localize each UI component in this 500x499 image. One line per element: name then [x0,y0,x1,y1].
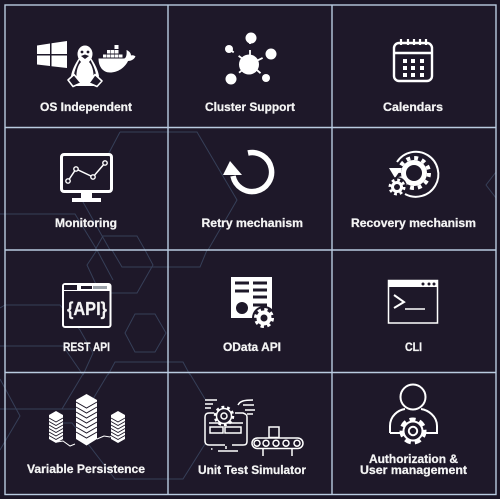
cell: Variable Persistence [27,394,145,476]
cell: Recovery mechanism [351,152,476,230]
label: Monitoring [55,216,117,230]
cell: Calendars [383,39,443,114]
icon: terminal window [388,280,438,323]
label: Cluster Support [205,100,295,114]
cell: Cluster Support [205,32,295,114]
icon: monitor chart [62,154,112,202]
cell: Authorization & User management [360,384,467,477]
icon: cluster network [225,32,276,84]
icon: Linux penguin [68,46,102,86]
label [360,452,467,477]
cell: REST API [63,284,110,354]
label: Recovery mechanism [351,216,476,230]
label: Variable Persistence [27,462,145,476]
label: Calendars [383,100,443,114]
label: Unit Test Simulator [198,463,306,477]
icon: API window: {API} [67,299,107,319]
label: CLI [405,342,422,354]
label: Retry mechanism [202,216,303,230]
icon: calendar [394,39,432,81]
icon: retry arrow [223,153,272,192]
icon: Docker whale [98,45,136,72]
cell: CLI [388,280,438,354]
icon: data stacks [49,394,125,446]
label: OS Independent [40,100,132,114]
icon: Windows logo [37,41,67,68]
cell: OS Independent [37,41,136,114]
icon: OData document gear [231,277,276,330]
label: OData API [223,340,281,354]
label: User management [360,463,467,477]
cell: Monitoring [55,154,117,230]
icon: test monitor and conveyor [205,400,303,456]
cell: Unit Test Simulator [198,400,306,477]
label: REST API [63,342,110,354]
cell: Retry mechanism [202,153,303,230]
icon: user with gear [390,384,437,442]
cell: OData API [223,277,281,354]
label: Authorization & [369,452,458,466]
icon: recovery gears [387,152,438,197]
